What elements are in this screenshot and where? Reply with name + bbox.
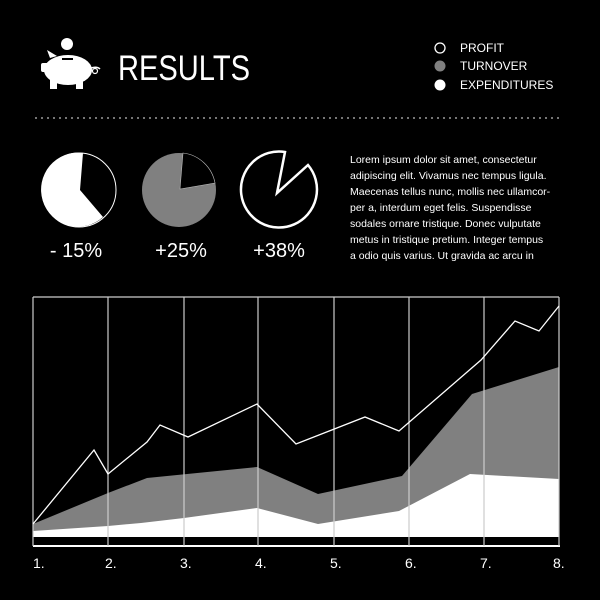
axis labels: 1. [33, 555, 45, 571]
text block: per a, interdum eget felis. Suspendisse [350, 202, 532, 214]
text block: adipiscing elit. Vivamus nec tempus ligula. [350, 170, 546, 182]
legend: TURNOVER [460, 59, 528, 73]
percent labels [50, 240, 305, 262]
percent labels: +25% [155, 240, 207, 262]
axis labels [33, 555, 565, 571]
axis labels: 6. [405, 555, 417, 571]
percent labels: +38% [253, 240, 305, 262]
axis labels: 8. [553, 555, 565, 571]
text block: Maecenas tellus nunc, mollis nec ullamcor- [350, 186, 551, 198]
chart [33, 297, 560, 547]
axis labels: 5. [330, 555, 342, 571]
pie: +25% [142, 153, 216, 227]
axis labels: 3. [180, 555, 192, 571]
text block: Lorem ipsum dolor sit amet, consectetur [350, 154, 537, 166]
legend: EXPENDITURES [460, 78, 553, 92]
pie: +38% [241, 152, 317, 228]
pie: -15% [41, 153, 116, 227]
text block: sodales ornare tristique. Donec vulputate [350, 218, 541, 230]
legend: PROFIT [460, 41, 505, 55]
percent labels: - 15% [50, 240, 102, 262]
text block: metus in tristique pretium. Integer tempus [350, 234, 543, 246]
axis labels: 7. [480, 555, 492, 571]
text block: a odio quis varius. Ut gravida ac arcu in [350, 250, 534, 262]
title: RESULTS [118, 49, 250, 88]
axis labels: 2. [105, 555, 117, 571]
text block [350, 154, 551, 262]
icon: piggy bank [41, 38, 100, 89]
axis labels: 4. [255, 555, 267, 571]
legend [434, 41, 553, 92]
